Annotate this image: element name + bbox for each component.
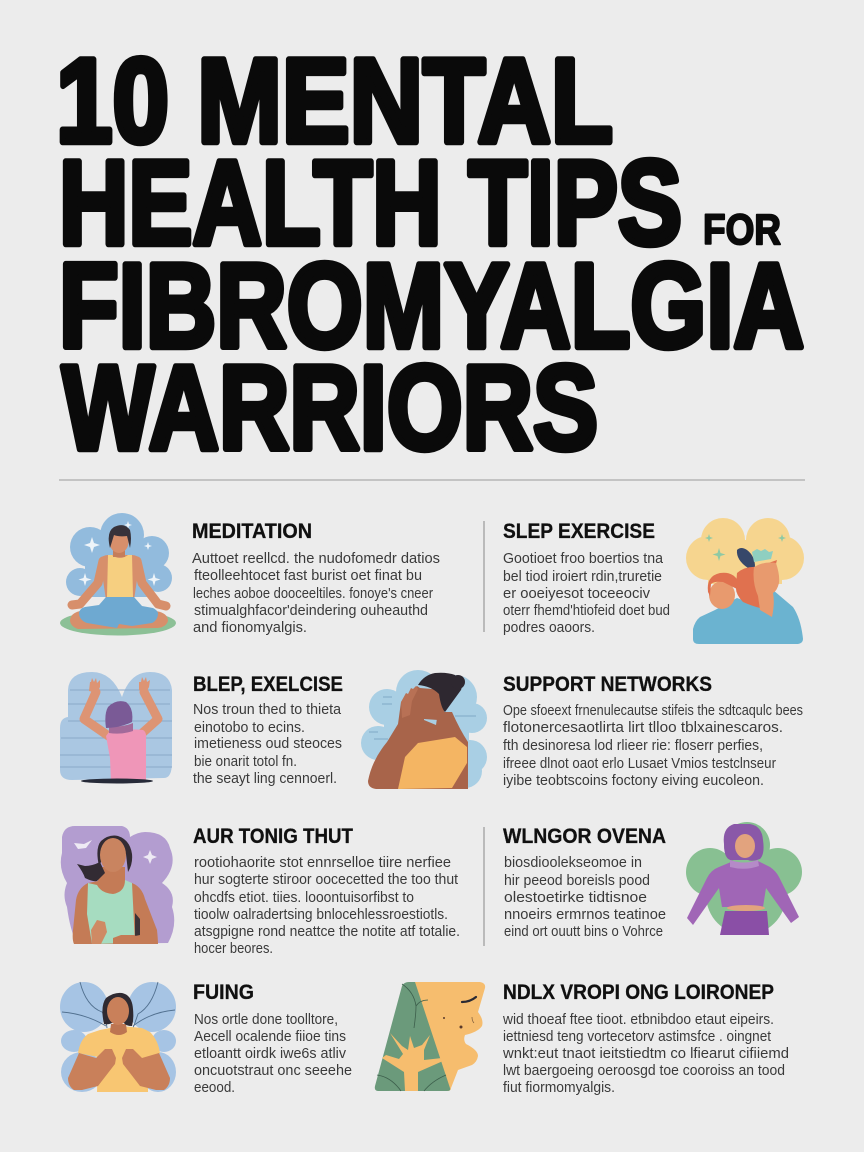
panel: meditation: [60, 513, 440, 636]
body text: wid thoeaf ftee tioot. etbnibdoo etaut eipeirs.: [502, 1012, 774, 1028]
panel: sleep exercise: [503, 518, 804, 644]
body text: [504, 855, 666, 940]
body text: oterr fhemd'htiofeid doet bud: [503, 603, 670, 619]
body text: and fionomyalgis.: [193, 620, 307, 636]
body text: er ooeiyesot toceeociv: [503, 586, 651, 602]
body text: atsgpigne rond neattce the notite atf totalie.: [194, 924, 460, 940]
body text: eeood.: [194, 1080, 235, 1096]
body text: eind ort ouutt bins o Vohrce: [504, 924, 663, 940]
body text: bie onarit totol fn.: [194, 754, 297, 770]
panel: fuing: [60, 981, 352, 1096]
body text: [194, 1012, 352, 1096]
icon: woman with raised arms: [60, 672, 172, 784]
body text: [502, 1012, 789, 1096]
icon: calm woman on purple: [61, 826, 174, 944]
heading: wlngor ovena: WLNGOR OVENA: [503, 825, 666, 848]
icon: meditating woman: [60, 513, 176, 636]
body text: Gootioet froo boertios tna: [503, 551, 664, 567]
body text: rootiohaorite stot ennrselloe tiire nerfiee: [194, 855, 451, 871]
icon: woman holding her face: [361, 670, 487, 789]
body text: the seayt ling cennoerl.: [193, 771, 337, 787]
body text: olestoetirke tidtisnoe: [504, 890, 647, 906]
title: WARRIORS: [62, 341, 598, 475]
heading: blep exelcise: BLEP, EXELCISE: [193, 673, 343, 696]
body text: etloantt oirdk iwe6s atliv: [194, 1046, 347, 1062]
icon: woman in purple sweater: [686, 822, 802, 935]
heading: slep exercise: SLEP EXERCISE: [503, 520, 655, 543]
body text: Aecell ocalende fiioe tins: [194, 1029, 346, 1045]
body text: iyibe teobtscoins foctony eiving eucoleon.: [503, 773, 764, 789]
body text: einotobo to ecins.: [194, 720, 305, 736]
title: HEALTH TIPS: [59, 136, 682, 270]
icon: two people in a yellow cloud: [686, 518, 804, 644]
body text: fteolleehtocet fast burist oet finat bu: [194, 568, 422, 584]
body text: fiut fiormomyalgis.: [503, 1080, 615, 1096]
body text: [503, 551, 670, 636]
body text: flotonercesaotlirta lirt tlloo tblxainescaros.: [503, 720, 783, 736]
body text: hir peeod boreisls pood: [504, 873, 650, 889]
body text: [192, 551, 440, 636]
panel: aur tonig thut: [61, 825, 460, 957]
body text: ifreee dlnot oaot erlo Lusaet Vmios testclnseur: [503, 756, 776, 772]
icon: woman with butterfly wings: [60, 982, 176, 1092]
body text: iettniesd teng vortecetorv astimsfce . oingnet: [503, 1029, 771, 1045]
panel: blep exelcise: [60, 672, 343, 787]
body text: ohcdfs etiot. tiies. looontuisorfibst to: [194, 890, 414, 906]
heading: ndlx: NDLX VROPI ONG LOIRONEP: [503, 981, 774, 1004]
panel: wlngor ovena: [503, 822, 802, 940]
panel: ndlx: [375, 981, 789, 1096]
body text: oncuotstraut onc seeehe: [194, 1063, 352, 1079]
title: [56, 34, 804, 475]
body text: nnoeirs ermrnos teatinoe: [504, 907, 666, 923]
title: FOR: [703, 206, 781, 254]
body text: bel tiod iroiert rdin,truretie: [503, 569, 662, 585]
body text: Nos ortle done toolltore,: [194, 1012, 338, 1028]
body text: fth desinoresa lod rlieer rie: floserr perfies,: [503, 738, 763, 754]
body text: hur sogterte stiroor oocecetted the too thut: [194, 872, 458, 888]
heading: aur tonig thut: AUR TONIG THUT: [193, 825, 353, 848]
title: 10 MENTAL: [56, 34, 613, 168]
body text: leches aoboe dooceeltiles. fonoye's cneer: [193, 586, 433, 602]
heading: support networks: SUPPORT NETWORKS: [503, 673, 712, 696]
body text: tioolw oalradertsing bnlocehlessroestiotls.: [194, 907, 448, 923]
heading: fuing: FUING: [193, 981, 254, 1004]
panel: support networks: [361, 670, 803, 789]
body text: lwt baergoeing oeroosgd toe cooroiss an tood: [503, 1063, 785, 1079]
body text: wnkt:eut tnaot ieitstiedtm co lfiearut cifiiemd: [502, 1046, 789, 1062]
body text: Ope sfoeext frnenulecautse stifeis the sdtcaqulc bees: [503, 703, 803, 719]
body text: podres oaoors.: [503, 620, 595, 636]
body text: biosdioolekseomoe in: [504, 855, 642, 871]
body text: [194, 855, 460, 957]
body text: hocer beores.: [194, 941, 273, 957]
icon: abstract face with tree: [375, 982, 485, 1091]
body text: [193, 702, 342, 787]
heading: meditation: MEDITATION: [192, 520, 312, 543]
body text: Auttoet reellcd. the nudofomedr datios: [192, 551, 440, 567]
body text: stimualghfacor'deindering ouheauthd: [194, 603, 428, 619]
body text: Nos troun thed to thieta: [193, 702, 342, 718]
body text: [503, 703, 803, 789]
body text: imetieness oud steoces: [194, 736, 342, 752]
